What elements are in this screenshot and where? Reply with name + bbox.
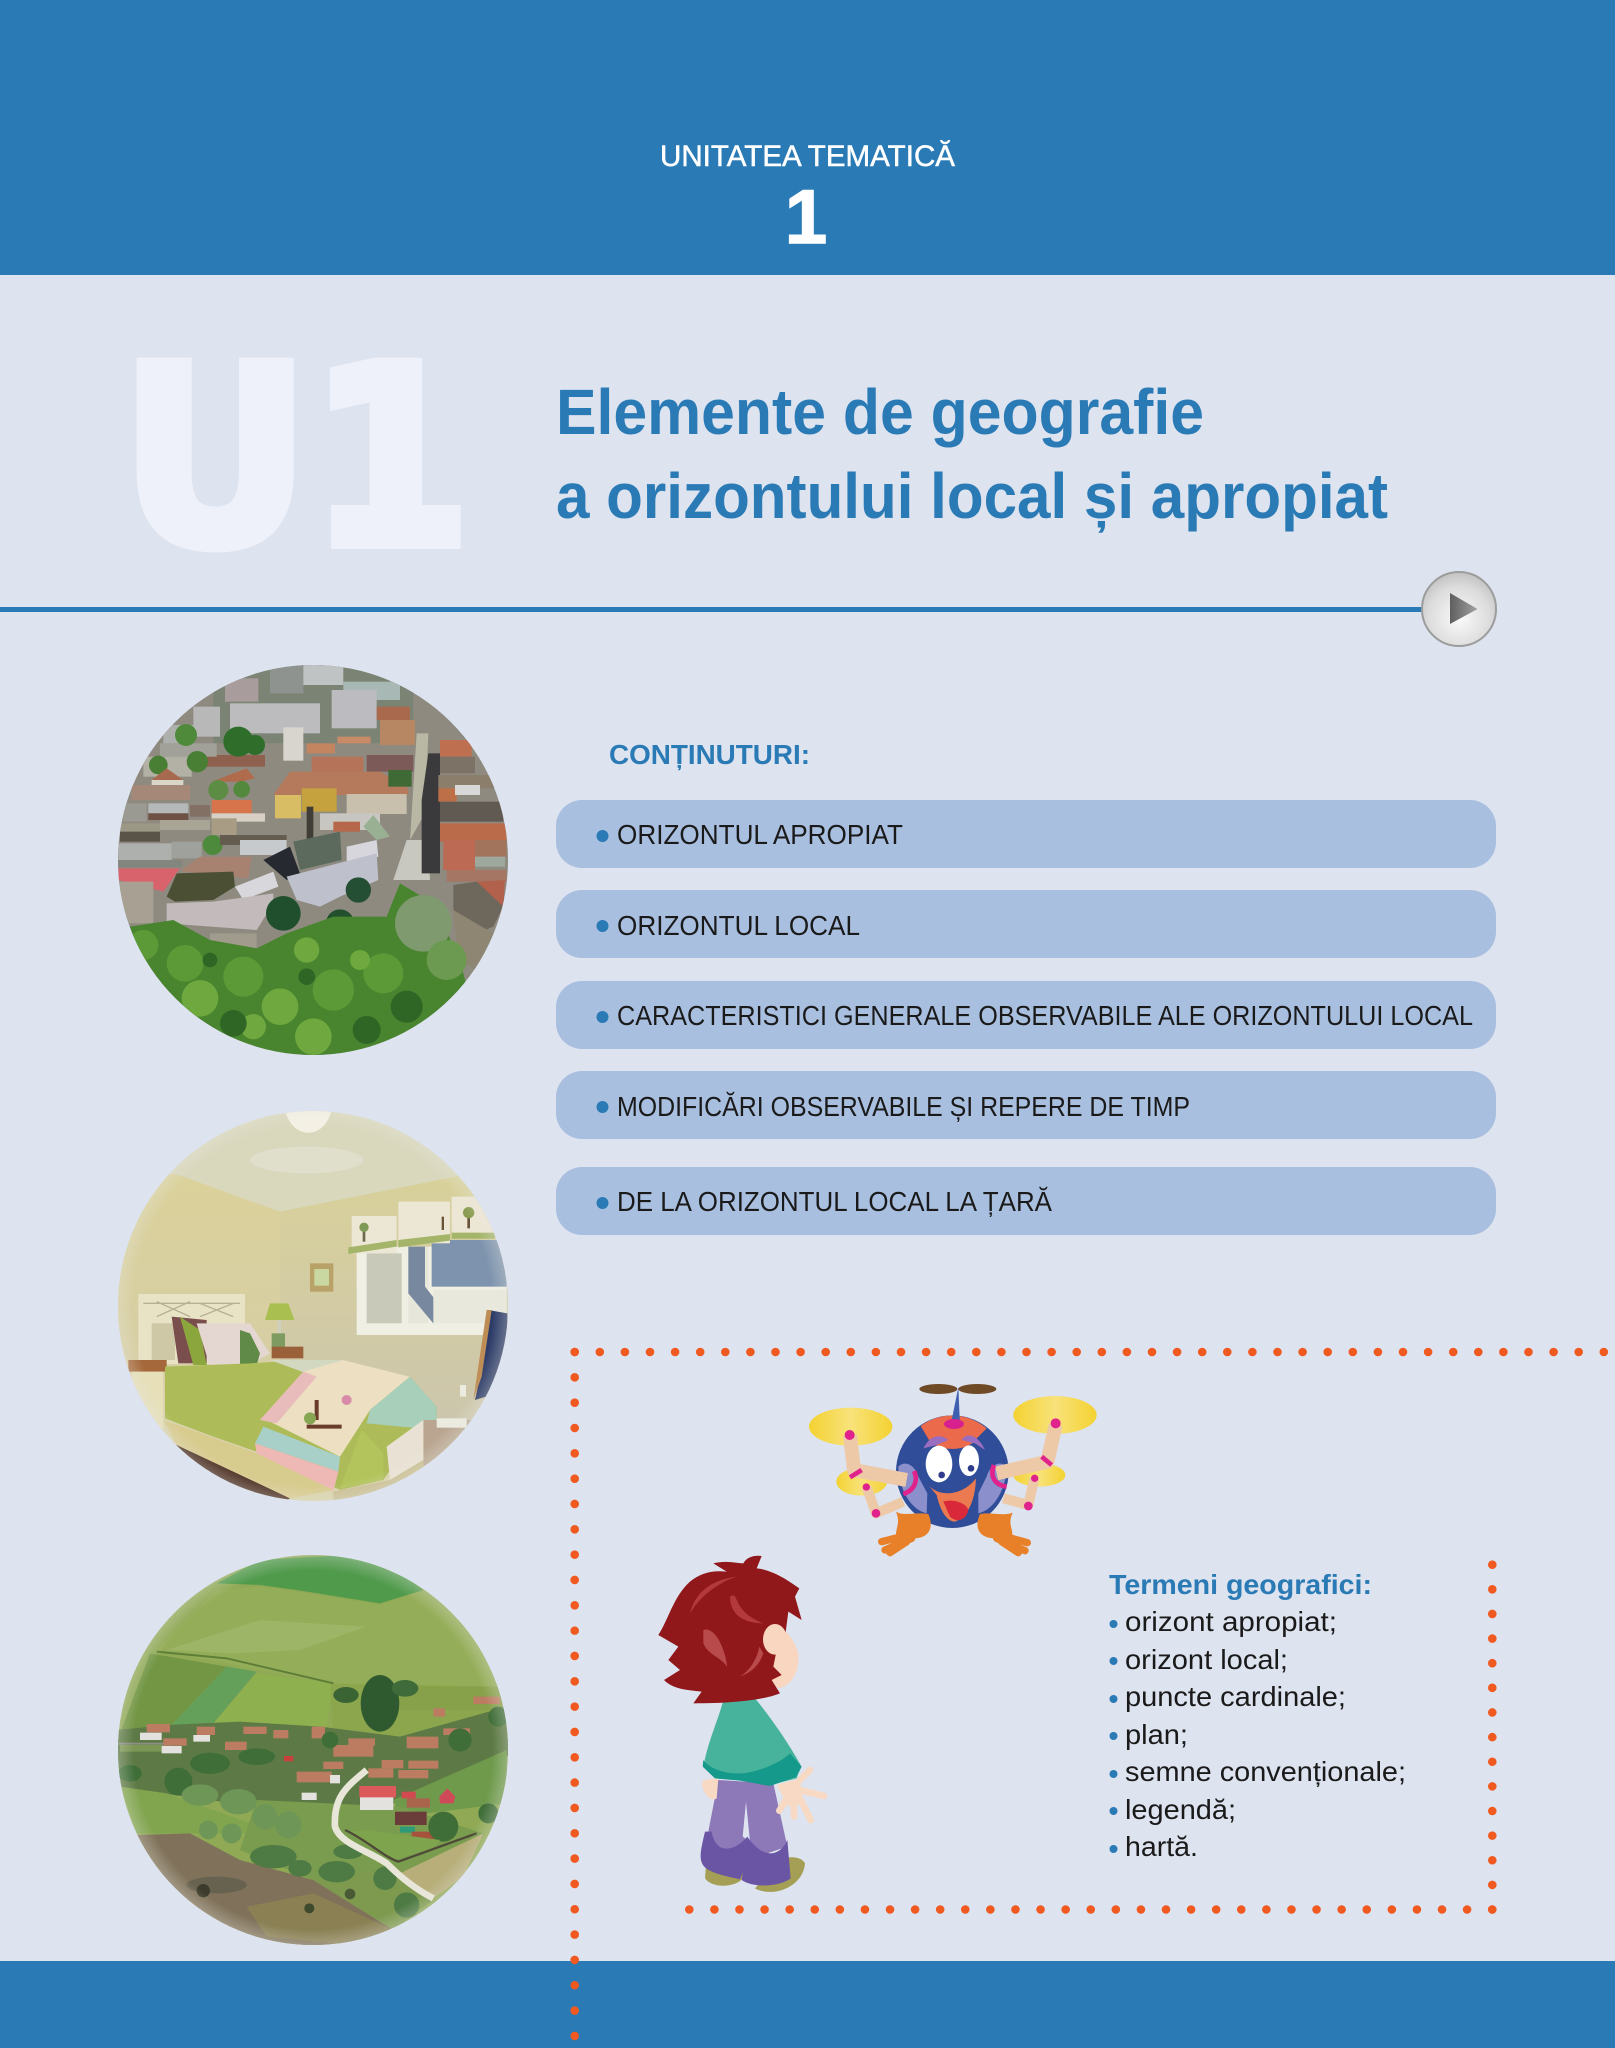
unit number: 1 [785, 175, 827, 260]
title: a orizontului local și apropiat [556, 460, 1388, 533]
pill: orizontul apropiat [556, 800, 1496, 868]
title: Elemente de geografie [556, 376, 1204, 448]
subheading: Termeni geografici: [1109, 1569, 1372, 1600]
divider with play button [0, 572, 1496, 646]
pill: modificari observabile: MODIFICĂRI OBSERVABILE ȘI REPERE DE TIMP [617, 1091, 1190, 1122]
header band [0, 0, 1615, 275]
photo: village in hills [118, 1555, 508, 1945]
ghost U1 mark: U1 [121, 316, 471, 602]
term list: plan; [1125, 1719, 1188, 1750]
pill: modificari observabile [556, 1071, 1496, 1139]
pill: caracteristici generale [556, 981, 1496, 1049]
pill: orizontul apropiat: ORIZONTUL APROPIAT [617, 819, 903, 850]
icon: open hand [777, 1770, 824, 1820]
illustration: flying ball mascot [809, 1384, 1097, 1553]
photo rims [118, 1111, 508, 1945]
pill: de la orizontul local la tara: DE LA ORIZONTUL LOCAL LA ȚARĂ [617, 1186, 1052, 1217]
photo: town aerial view [118, 665, 508, 1055]
icon: left hand [882, 1512, 931, 1553]
term list: puncte cardinale; [1125, 1681, 1346, 1712]
term list: legendă; [1125, 1794, 1236, 1825]
illustration: boy seen from behind [658, 1556, 824, 1892]
text block: geographic terms [1109, 1569, 1406, 1862]
icon: right hand [977, 1513, 1027, 1553]
pill: orizontul local: ORIZONTUL LOCAL [617, 910, 860, 941]
term list: hartă. [1125, 1831, 1198, 1862]
term list: orizont local; [1125, 1644, 1288, 1675]
dotted frame [575, 1352, 1612, 2045]
pill: caracteristici generale: CARACTERISTICI GENERALE OBSERVABILE ALE ORIZONTULUI LOCAL [617, 1000, 1473, 1031]
icon: play button [1422, 572, 1496, 646]
unit label: UNITATEA TEMATICĂ [660, 140, 955, 173]
pill: de la orizontul local la tara [556, 1167, 1496, 1235]
heading: contents: CONȚINUTURI: [609, 739, 810, 770]
pill: orizontul local [556, 890, 1496, 958]
term list [1110, 1606, 1406, 1862]
photo: bedroom [118, 1111, 508, 1501]
term list: semne convenționale; [1125, 1756, 1406, 1787]
title [556, 376, 1388, 533]
term list: orizont apropiat; [1125, 1606, 1337, 1637]
footer band [0, 1961, 1615, 2048]
